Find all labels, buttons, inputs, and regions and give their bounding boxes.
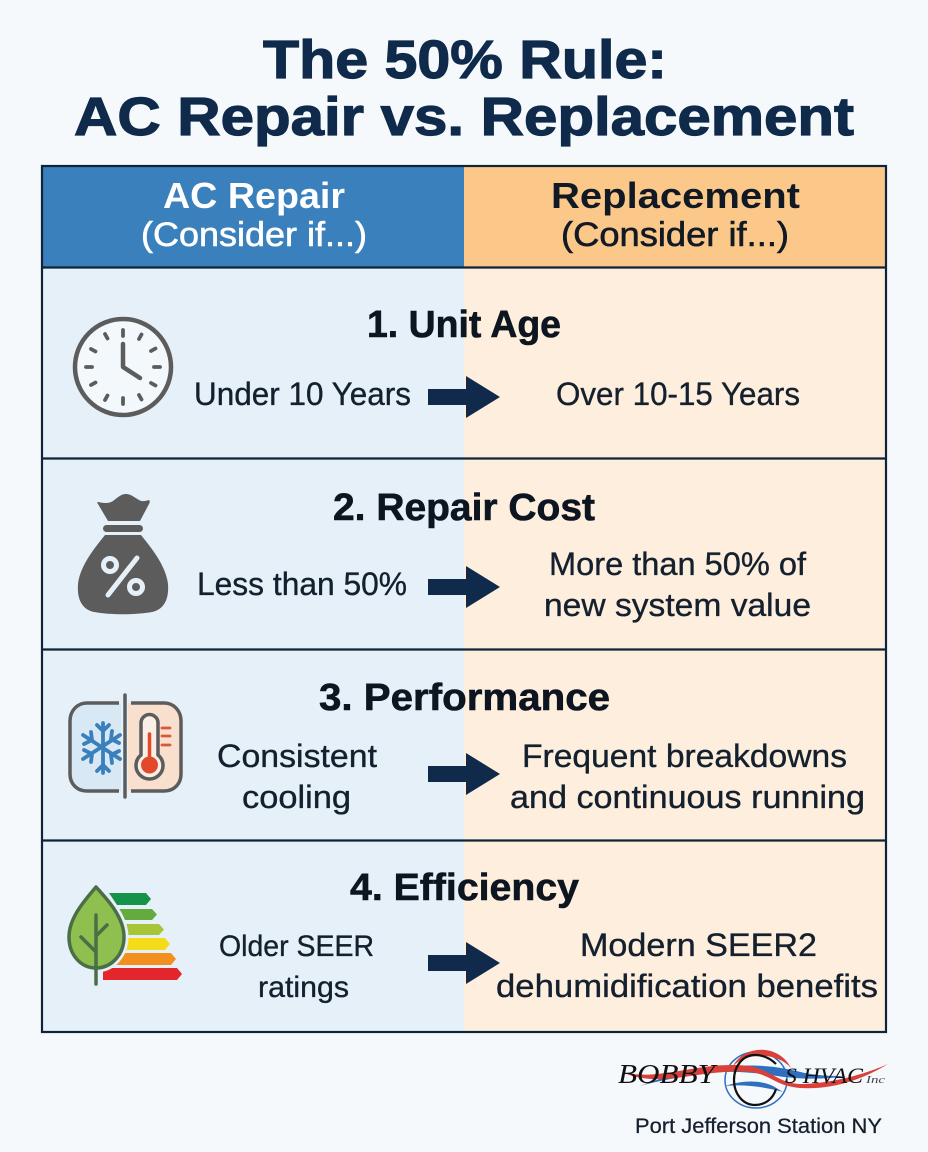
header: AC Repair column: AC Repair bbox=[163, 175, 345, 216]
text: less than 50%: Less than 50% bbox=[197, 566, 407, 602]
header: Replacement column: Replacement bbox=[551, 175, 800, 216]
text: consistent cooling: Consistent bbox=[217, 738, 377, 774]
icon: money bag with percent bbox=[78, 494, 168, 614]
row: unit age bbox=[42, 267, 886, 458]
arrow bbox=[428, 942, 500, 984]
table borders bbox=[42, 166, 886, 1032]
header: AC Repair column: (Consider if...) bbox=[141, 216, 367, 254]
text: more than 50% of new system value bbox=[544, 546, 811, 623]
title bbox=[74, 30, 854, 147]
arrow bbox=[428, 753, 500, 795]
comparison table bbox=[42, 166, 886, 1032]
row: repair cost bbox=[42, 458, 886, 649]
header: AC Repair column bbox=[42, 166, 464, 267]
text: under 10 years: Under 10 Years bbox=[194, 376, 411, 412]
text: more than 50% of new system value: More than 50% of bbox=[549, 546, 806, 582]
heading: unit age: 1. Unit Age bbox=[367, 304, 561, 346]
title: AC Repair vs. Replacement bbox=[74, 87, 854, 147]
arrow bbox=[428, 566, 500, 608]
location text: Port Jefferson Station NY bbox=[635, 1115, 882, 1138]
heading: performance: 3. Performance bbox=[319, 677, 610, 719]
arrow bbox=[428, 376, 500, 418]
header: Replacement column: (Consider if...) bbox=[561, 216, 789, 254]
text: older seer ratings: ratings bbox=[258, 971, 349, 1004]
text: older seer ratings: Older SEER bbox=[219, 930, 374, 963]
text: more than 50% of new system value: new system value bbox=[544, 587, 811, 623]
title: The 50% Rule: bbox=[263, 30, 667, 90]
heading: repair cost: 2. Repair Cost bbox=[333, 487, 595, 529]
logo: Bobby C's HVAC: Inc bbox=[865, 1074, 885, 1086]
logo: Bobby C's HVAC bbox=[618, 1050, 888, 1108]
text: frequent breakdowns and continuous running: Frequent breakdowns bbox=[522, 738, 847, 774]
icon: leaf with energy rating bars bbox=[69, 887, 182, 984]
text: modern seer2 dehumidification benefits bbox=[496, 927, 878, 1004]
text: frequent breakdowns and continuous running bbox=[510, 738, 865, 815]
icon: clock bbox=[75, 319, 171, 415]
text: over 10-15 years: Over 10-15 Years bbox=[556, 376, 800, 412]
text: older seer ratings bbox=[219, 930, 374, 1004]
logo: Bobby C's HVAC: S HVAC bbox=[785, 1063, 863, 1088]
text: modern seer2 dehumidification benefits: Modern SEER2 bbox=[580, 927, 817, 963]
text: consistent cooling bbox=[217, 738, 377, 815]
heading: efficiency: 4. Efficiency bbox=[350, 867, 579, 909]
text: consistent cooling: cooling bbox=[242, 779, 351, 815]
row: efficiency bbox=[42, 840, 886, 1032]
logo: Bobby C's HVAC: BOBBY bbox=[618, 1059, 718, 1089]
row: performance bbox=[42, 649, 886, 840]
text: modern seer2 dehumidification benefits: dehumidification benefits bbox=[496, 968, 878, 1004]
icon: snowflake and thermometer bbox=[70, 695, 181, 797]
text: frequent breakdowns and continuous running: and continuous running bbox=[510, 779, 865, 815]
header: Replacement column bbox=[464, 166, 886, 267]
